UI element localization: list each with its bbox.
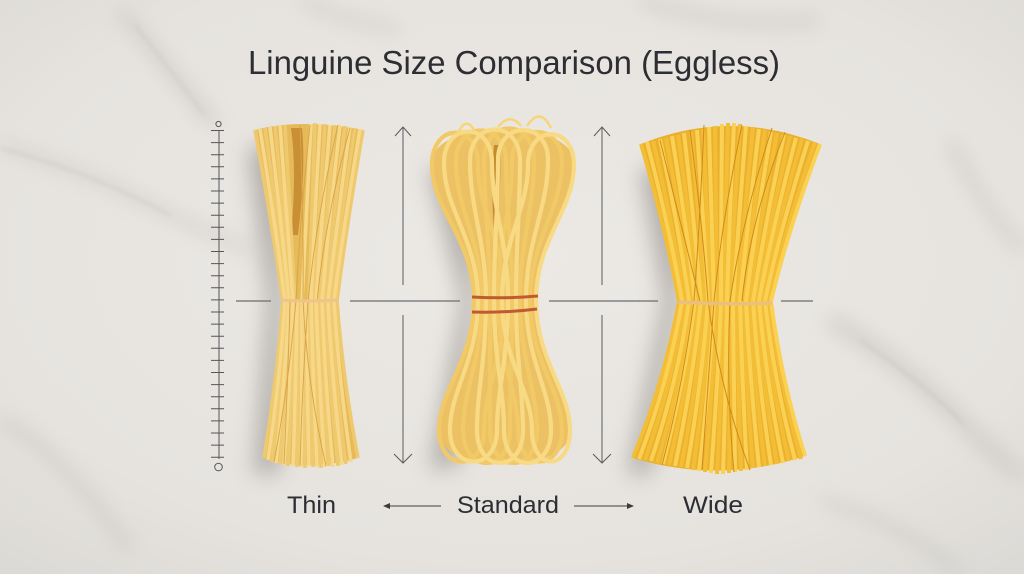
title: Linguine Size Comparison (Eggless) bbox=[248, 44, 780, 81]
twine: thin bbox=[281, 300, 338, 301]
bundle: wide linguine bbox=[633, 123, 820, 474]
rubber bands: standard bbox=[472, 296, 538, 312]
bundle: standard linguine bbox=[431, 116, 575, 464]
labels bbox=[287, 492, 743, 519]
bundle shadows bbox=[248, 140, 690, 475]
twine: wide bbox=[678, 302, 772, 304]
label: wide: Wide bbox=[683, 492, 743, 519]
arrow: left to thin bbox=[383, 503, 441, 509]
label: thin: Thin bbox=[287, 492, 336, 519]
ruler bbox=[215, 121, 222, 471]
label: standard: Standard bbox=[457, 492, 559, 519]
arrow: right to wide bbox=[574, 503, 634, 509]
guide lines and size arrows bbox=[236, 127, 813, 463]
bundle: thin linguine bbox=[255, 123, 363, 468]
